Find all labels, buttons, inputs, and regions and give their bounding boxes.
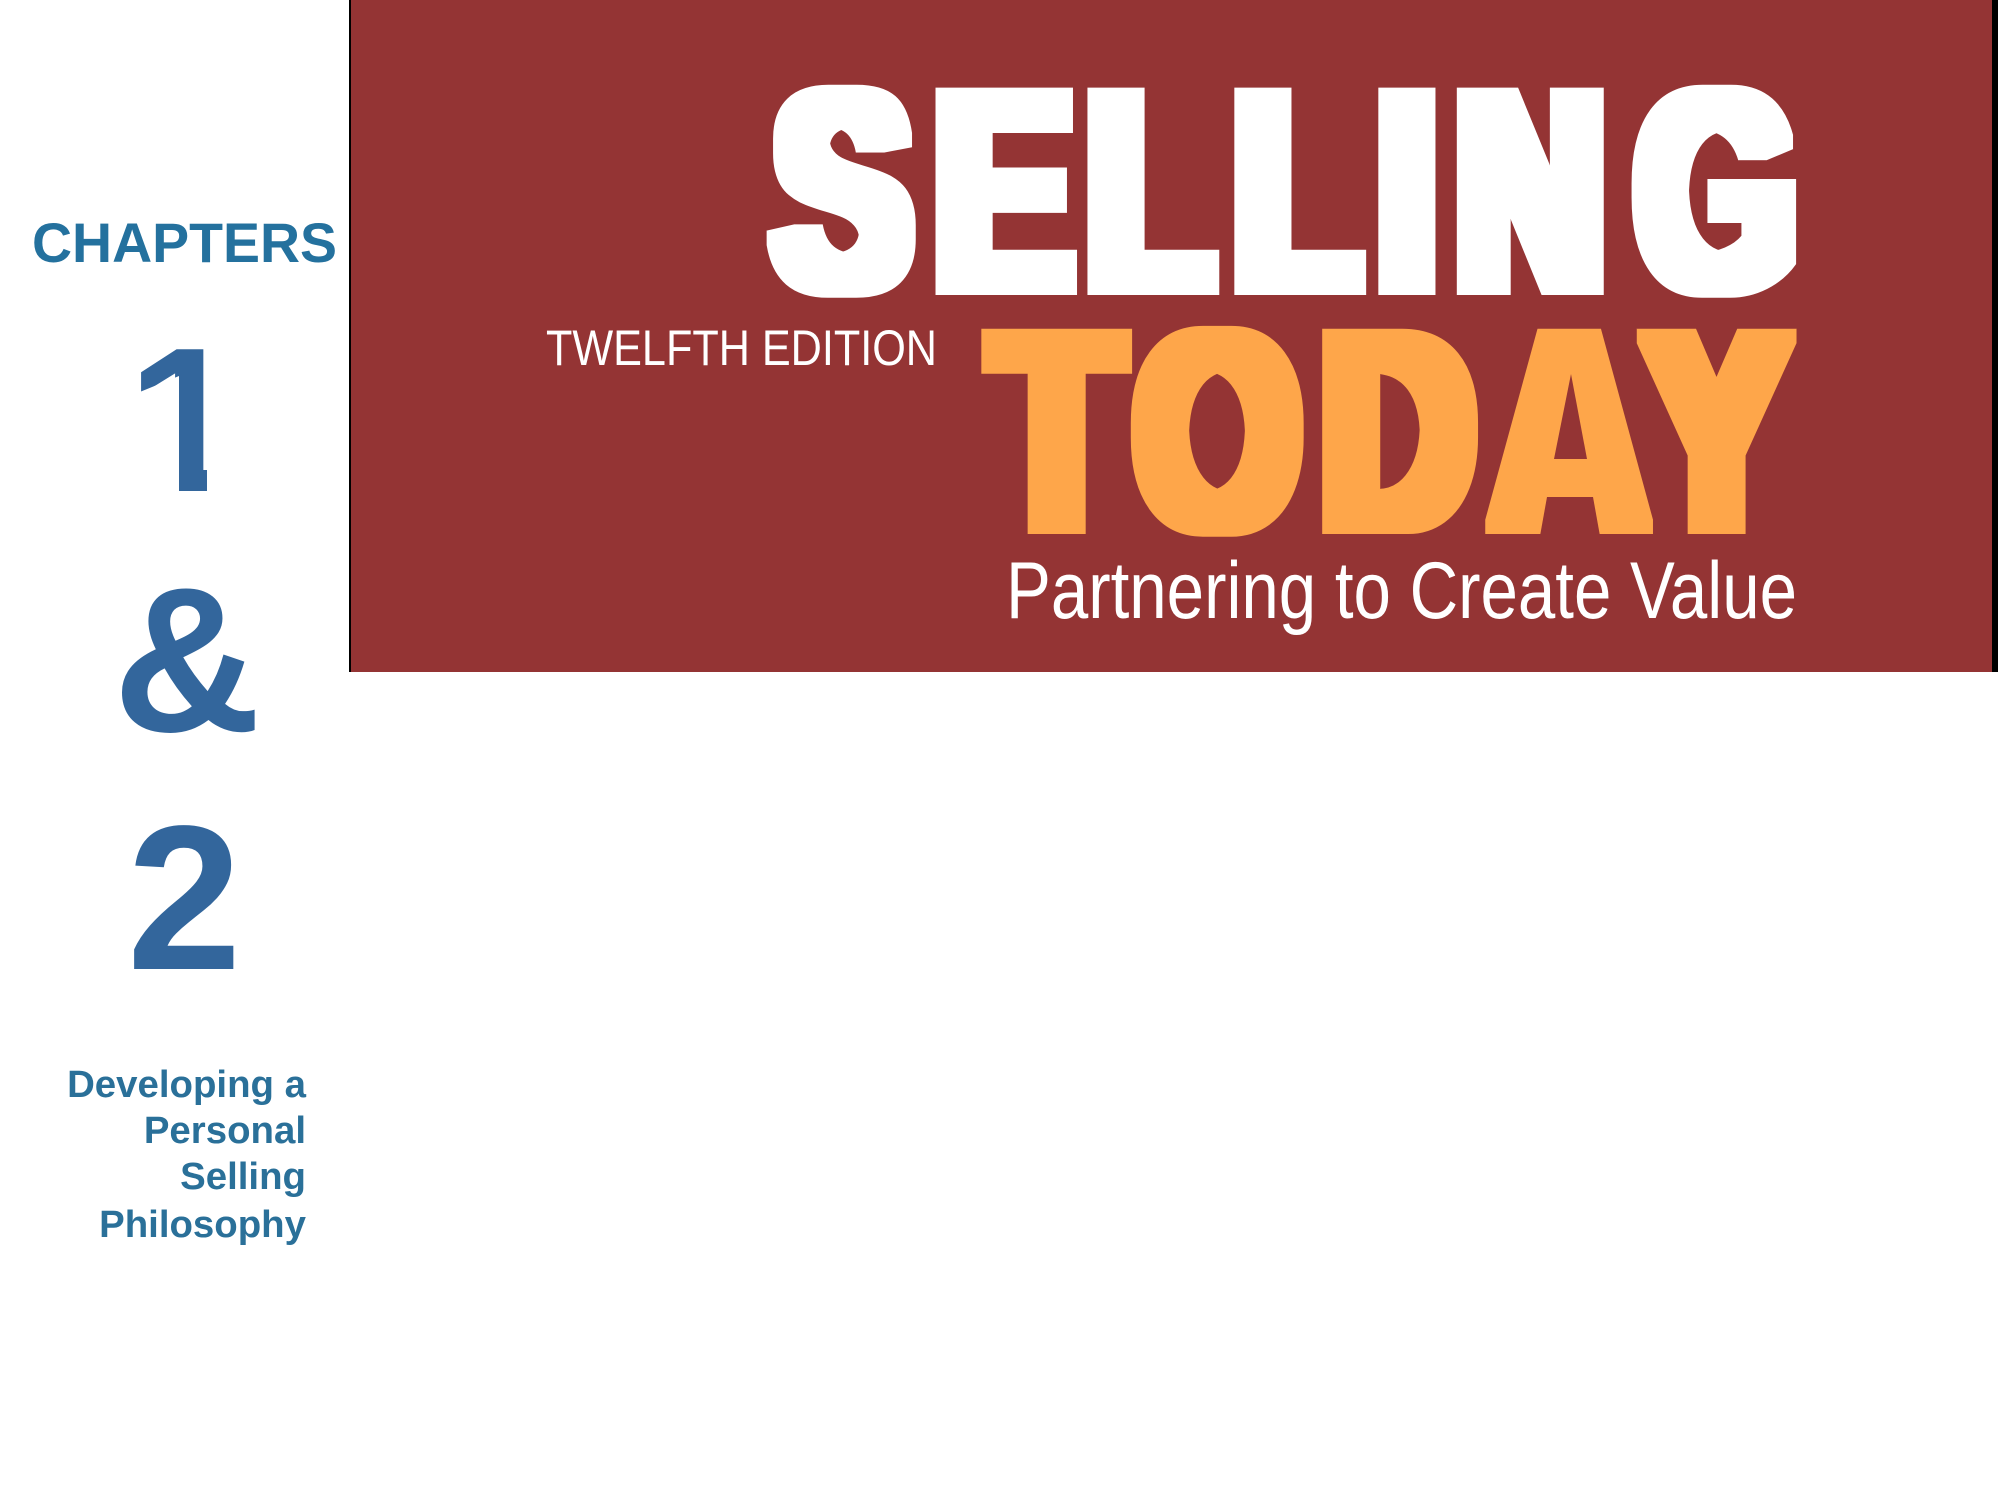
chapter title — [67, 1063, 307, 1246]
chapter title: Selling — [180, 1155, 306, 1198]
letter A counter shaping — [1540, 374, 1600, 536]
chapter number 1: 1 — [127, 305, 242, 535]
ampersand: & — [113, 545, 261, 775]
chapter number 2: 2 — [127, 783, 242, 1013]
subtitle: Partnering to Create Value — [1006, 546, 1797, 636]
heading: chapters: CHAPTERS — [32, 211, 337, 274]
chapter title: Personal — [144, 1109, 306, 1152]
edition label: TWELFTH EDITION — [546, 320, 937, 376]
chapter title: Philosophy — [99, 1203, 307, 1246]
title: SELLING: SELLING — [775, 33, 1795, 348]
panel: book cover banner — [349, 0, 1998, 672]
title: TODAY: TODAY — [993, 277, 1786, 587]
chapter title: Developing a — [67, 1063, 307, 1106]
